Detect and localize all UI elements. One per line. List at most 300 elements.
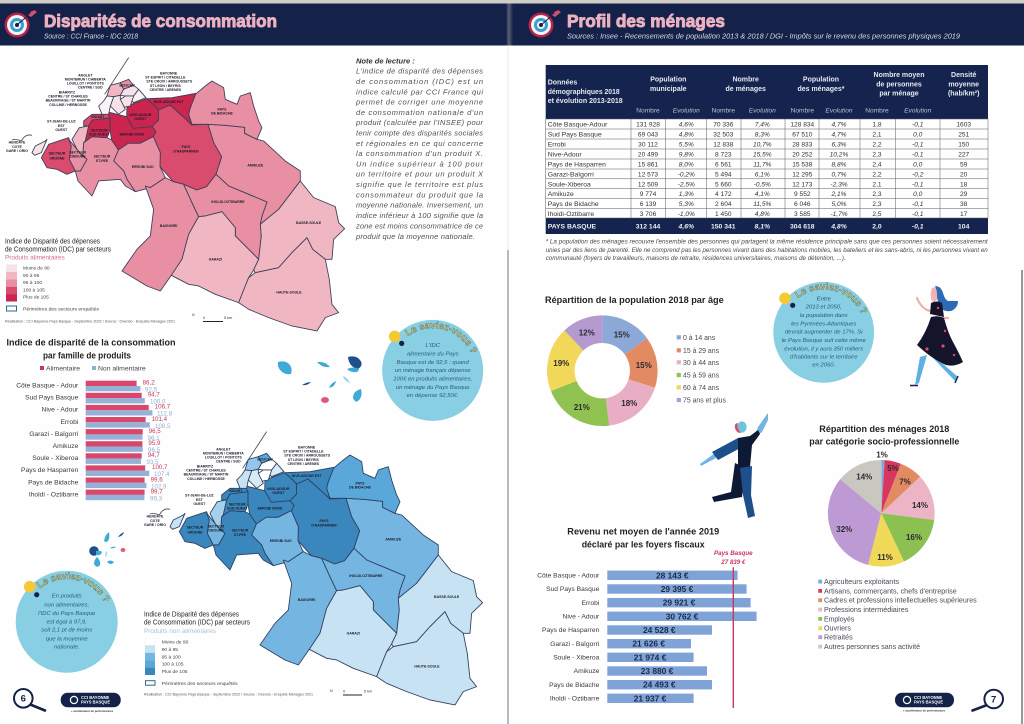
- table header: Nombre: [712, 108, 735, 114]
- bar chart: revenu: Pays de Bidache: [549, 682, 600, 689]
- map labels: [6, 71, 322, 295]
- callout text: 100€ en produits alimentaires,: [393, 376, 472, 382]
- table rows: 6,3%: [831, 142, 847, 148]
- table rows: 28 833: [792, 142, 813, 148]
- table rows: 3 585: [794, 211, 811, 218]
- map labels: BIARRITZ: [59, 90, 76, 94]
- map labels: PAYS: [320, 519, 329, 523]
- map labels: CIBOURE: [208, 529, 224, 533]
- map labels: HENDAYE: [9, 141, 26, 145]
- table rows: 4,7%: [831, 122, 847, 128]
- map labels: ERROBI SUD: [132, 165, 154, 169]
- table rows: -0,1: [912, 201, 924, 208]
- bar chart: alimentaire vs non alimentaire: Garazi - Baïgorri: [29, 431, 79, 438]
- table rows: 2,3: [872, 191, 882, 198]
- table header: moyenne: [948, 81, 979, 88]
- map labels: HAUTE-SOULE: [414, 665, 440, 669]
- heading: revenu net moyen: Revenu net moyen de l'année 2019: [567, 526, 719, 536]
- table rows: 10,7%: [753, 142, 772, 148]
- table header: Evolution: [904, 108, 932, 114]
- title: Disparités de consommation: [44, 11, 277, 31]
- table total row: 2,0: [872, 224, 882, 230]
- legend: pie: Agriculteurs exploitants: [824, 579, 900, 586]
- table rows: 3 706: [640, 211, 657, 218]
- reference line: Pays Basque: [714, 550, 753, 708]
- table rows: Nive-Adour: [548, 152, 582, 158]
- table header: [548, 72, 979, 114]
- bar chart: alimentaire vs non alimentaire: 107,4: [154, 471, 170, 478]
- table rows: 2,3: [872, 152, 882, 158]
- logo CCI right: PAYS BASQUE: [914, 700, 943, 704]
- table header: de personnes: [876, 81, 922, 88]
- map labels: STE CROIX / ARROUSSETS: [146, 80, 193, 84]
- table rows: -0,1: [912, 122, 924, 128]
- bar chart: alimentaire vs non alimentaire: 92,5: [145, 386, 158, 394]
- table rows: 251: [958, 132, 970, 138]
- table rows: 4,6%: [679, 122, 694, 128]
- table rows: 131 928: [636, 122, 660, 128]
- map labels: PAYS: [356, 481, 365, 485]
- callout text: L'IDC: [425, 343, 441, 349]
- map labels: SUD-OUEST: [89, 132, 110, 136]
- callout: le saviez-vous population: [773, 282, 874, 383]
- table rows: 12 509: [638, 181, 658, 188]
- table header: par ménage: [879, 91, 919, 98]
- table header: démographiques 2018: [548, 89, 620, 96]
- table rows: -1,7%: [830, 211, 848, 218]
- bar chart: revenu: 29 921 €: [663, 598, 696, 608]
- bar chart: alimentaire vs non alimentaire: Errobi: [60, 419, 79, 426]
- map labels: IHOLDI-OZTIBARRE: [349, 574, 383, 578]
- legend: map non alimentaire: Réalisation : CCI Bayonne Pays Basque - Septembre 2022 / Source : Oxendo - Enquête Ménages 2021: [144, 692, 313, 696]
- text block: note de lecture: permet de corriger une moyenne: [355, 98, 483, 107]
- map labels: ST LEON / BEYRIS: [150, 84, 181, 88]
- callout heading: Le saviez-vous ?: [36, 572, 110, 601]
- map labels: BAIGORRI: [298, 598, 315, 602]
- table rows: 2 604: [715, 201, 732, 208]
- callout text: l'IDC du Pays Basque: [38, 611, 96, 617]
- bar chart: alimentaire vs non alimentaire: Alimentaire: [46, 365, 80, 372]
- logo CCI right: + accélérateur de performances: [903, 708, 946, 712]
- map labels: EST: [196, 498, 204, 502]
- legend: map alimentaire: 5 km: [224, 316, 232, 320]
- map labels: ST-PEE: [96, 159, 109, 163]
- legend: donut: 60 à 74 ans: [683, 385, 720, 392]
- legend: map alimentaire: Plus de 105: [23, 294, 49, 300]
- table header: Population: [650, 76, 686, 84]
- bar chart: alimentaire vs non alimentaire: 86,2: [143, 380, 155, 386]
- pie chart: ménages par CSP: 11%: [877, 553, 893, 562]
- map labels: AMIKUZE: [247, 164, 264, 168]
- map labels: OUEST: [55, 128, 68, 132]
- legend: pie: Cadres et professions intellectuelles supérieures: [824, 598, 977, 605]
- bar chart: alimentaire vs non alimentaire: 99,6: [151, 476, 163, 483]
- map labels: LOUILLOT / PONTOTS: [67, 81, 105, 85]
- callout text: [782, 296, 866, 368]
- map labels: BAYONNE: [160, 71, 178, 75]
- table rows: -0,1: [912, 181, 924, 188]
- map labels: BIARRITZ: [197, 464, 214, 468]
- bar chart: alimentaire vs non alimentaire: 96,1: [148, 435, 160, 442]
- legend: donut: 45 à 59 ans: [683, 372, 720, 380]
- donut chart: population par âge: 18%: [621, 399, 637, 408]
- bar chart: alimentaire vs non alimentaire: 94,7: [148, 392, 160, 399]
- legend: pie: Retraités: [824, 635, 853, 642]
- table rows: 20 252: [792, 152, 813, 158]
- legend: pie: Professions intermédiaires: [824, 607, 909, 614]
- map labels: STE CROIX / ARROUSSETS: [284, 454, 331, 458]
- bar chart: revenu: Sud Pays Basque: [546, 586, 600, 593]
- legend: map non alimentaire: 100 à 105: [162, 662, 184, 668]
- bar chart: revenu: Garazi - Baïgorri: [550, 641, 600, 648]
- text block: note de lecture: signifie que le territoire est plus: [356, 180, 483, 189]
- legend: map non alimentaire: 5 km: [364, 690, 372, 694]
- bar chart: revenu: 21 937 €: [634, 693, 667, 703]
- bar chart: alimentaire vs non alimentaire: Côte Basque - Adour: [16, 382, 79, 390]
- heading: revenu net moyen: [567, 526, 719, 550]
- table rows: 5 660: [715, 181, 732, 188]
- table rows: 29: [960, 191, 968, 198]
- icon: bulb: [389, 331, 404, 346]
- text block: note de lecture: indice inférieur à 100 signifie que la: [356, 211, 483, 220]
- legend: map alimentaire: [5, 238, 232, 324]
- map labels: ST ESPRIT / CITADELLE: [145, 76, 186, 80]
- table header: et évolution 2013-2018: [548, 98, 623, 105]
- table rows: 20 499: [638, 152, 658, 158]
- legend: pie: Autres personnes sans activité: [824, 644, 920, 651]
- pie chart: ménages par CSP: 16%: [906, 533, 922, 542]
- callout text: devrait augmenter de 17%. Si: [785, 330, 863, 336]
- pie chart: ménages par CSP: 7%: [899, 478, 911, 486]
- bar chart: revenu: 29 395 €: [661, 584, 694, 594]
- table rows: 5,0%: [831, 201, 847, 208]
- callout text: [38, 594, 96, 651]
- page number 6: 6: [21, 694, 26, 704]
- map labels: PAYS: [218, 107, 227, 111]
- legend: map non alimentaire: N: [330, 689, 333, 693]
- pie chart: ménages par CSP: 14%: [912, 501, 928, 510]
- table rows: 0,7%: [831, 171, 847, 178]
- legend: donut: 0 à 14 ans: [683, 335, 716, 342]
- table total row: 150 341: [711, 224, 736, 230]
- logo CCI left: [61, 693, 121, 713]
- map labels: COLLINE / HERBOSSE: [49, 103, 88, 107]
- legend: map alimentaire: 95 à 100: [23, 280, 42, 286]
- map labels: NIVE-ADOUR: [129, 113, 152, 117]
- bar chart: alimentaire vs non alimentaire: 93,5: [146, 459, 159, 466]
- table total row: 304 618: [790, 224, 815, 230]
- page number 7: [972, 690, 1003, 710]
- text block: note de lecture: zone est moins consommatrice de ce: [355, 222, 483, 230]
- bar chart: revenu: 28 143 €: [656, 570, 689, 580]
- bar chart: alimentaire vs non alimentaire: 108,5: [155, 423, 171, 430]
- text block: note de lecture: [355, 56, 484, 241]
- legend: map non alimentaire: Produits non alimentaires: [144, 628, 216, 635]
- bar chart: alimentaire vs non alimentaire: Nive - Adour: [41, 407, 79, 414]
- legend: map non alimentaire: 90 à 95: [162, 647, 178, 653]
- text block: note de lecture: de consommation (IDC) est un: [356, 77, 483, 86]
- table header: Densité: [951, 72, 976, 79]
- map labels: ANGLET: [78, 73, 93, 77]
- map labels: SECTEUR: [91, 129, 108, 133]
- legend: pie: Ouvriers: [824, 626, 852, 633]
- map labels: ST ESPRIT / CITADELLE: [283, 450, 324, 454]
- table rows: [548, 122, 971, 218]
- table rows: 0,0: [913, 132, 923, 138]
- icon: target right: [528, 10, 561, 38]
- table rows: Côte Basque-Adour: [548, 122, 608, 128]
- table total row: [548, 224, 970, 230]
- callout text: évolution, il y aura 350 milliers: [784, 346, 863, 352]
- bar chart: alimentaire vs non alimentaire: 101,4: [152, 416, 168, 423]
- table rows: Pays de Bidache: [548, 201, 599, 208]
- legend: map alimentaire: Périmètres des secteurs enquêtés: [23, 306, 100, 312]
- text block: note de lecture: de consommation nationale d'un: [356, 108, 483, 117]
- source line: Source : CCI France - IDC 2018: [44, 31, 138, 40]
- heading: indice par famille: [6, 338, 176, 362]
- bar chart: alimentaire vs non alimentaire: 96,5: [149, 428, 161, 435]
- table rows: 12 295: [792, 171, 813, 178]
- table rows: 5,5%: [679, 142, 694, 148]
- callout text: d'habitants sur le territoire: [790, 355, 858, 361]
- logo CCI right: [895, 693, 954, 712]
- text block: note de lecture: moyenne nationale. Inversement, un: [356, 201, 483, 210]
- callout heading: Le saviez-vous ?: [794, 282, 868, 313]
- map labels: CENTRE / SUD: [78, 86, 103, 90]
- table rows: 12 573: [638, 171, 658, 178]
- pie chart: ménages par CSP: 5%: [887, 464, 899, 473]
- table rows: 0,0: [913, 162, 923, 168]
- callout: le saviez-vous alimentaire: [382, 320, 484, 421]
- map labels: BEAURIVAGE / ST MARTIN: [184, 473, 229, 477]
- table rows: Garazi-Baïgorri: [548, 171, 594, 178]
- heading: revenu net moyen: déclaré par les foyers fiscaux: [582, 540, 705, 550]
- table rows: 1,3%: [679, 191, 694, 198]
- bar chart: alimentaire vs non alimentaire: Amikuze: [53, 443, 79, 450]
- table rows: 8,8%: [831, 162, 847, 168]
- pie chart: ménages par CSP: 14%: [856, 472, 872, 482]
- bar chart: alimentaire vs non alimentaire: 95,9: [148, 440, 161, 447]
- map labels: D'HASPARREN: [311, 523, 337, 527]
- table header: Evolution: [673, 108, 700, 114]
- callout text: nationale.: [54, 645, 79, 651]
- map labels: SECTEUR: [49, 152, 66, 156]
- map labels: GARAZI: [209, 258, 222, 262]
- table rows: 4,7%: [831, 132, 847, 138]
- legend: donut: [677, 335, 726, 404]
- bar chart: revenu: 23 880 €: [641, 666, 674, 676]
- donut chart: population par âge: [547, 315, 658, 426]
- legend: map alimentaire: N: [192, 313, 195, 317]
- bar chart: alimentaire vs non alimentaire: 99,3: [150, 495, 163, 502]
- table header: Nombre: [732, 76, 759, 84]
- map labels: SECTEUR: [187, 526, 204, 530]
- legend: map non alimentaire: 0: [343, 690, 345, 694]
- page number 7: 7: [991, 694, 996, 705]
- map labels: SUD-OUEST: [227, 506, 248, 510]
- table rows: 2,2: [872, 142, 882, 148]
- footnote: [546, 238, 988, 262]
- map labels: SECTEUR: [207, 525, 224, 529]
- legend: donut: 75 ans et plus: [683, 398, 726, 404]
- map labels: BOUCAU: [257, 457, 273, 461]
- map labels: ERROBI SUD: [270, 539, 292, 543]
- donut chart: population par âge: 21%: [574, 403, 590, 412]
- text block: note de lecture: indice calculé par CCI France qui: [356, 87, 483, 96]
- logo CCI right: CCI BAYONNE: [914, 695, 943, 700]
- table header: Evolution: [825, 108, 853, 114]
- table rows: 15 861: [638, 162, 658, 168]
- table rows: -0,5%: [754, 181, 771, 188]
- table rows: 12 173: [792, 181, 813, 188]
- table rows: 1603: [956, 122, 971, 128]
- table rows: 7,4%: [755, 122, 770, 128]
- callout text: que la moyenne: [46, 636, 88, 642]
- map labels: MONTBRUN / CHIBERTA: [203, 451, 244, 455]
- table rows: 11,5%: [753, 201, 772, 208]
- bar chart: alimentaire vs non alimentaire: [16, 365, 173, 502]
- table header: Nombre moyen: [874, 72, 924, 79]
- table rows: 6 046: [794, 201, 811, 208]
- table rows: 6 139: [640, 201, 657, 208]
- table rows: -2,3%: [830, 181, 848, 188]
- table rows: 4,1%: [755, 191, 770, 198]
- table rows: 6 561: [715, 162, 732, 168]
- table rows: 67 510: [792, 132, 813, 138]
- bar chart: alimentaire vs non alimentaire: 96,5: [148, 447, 161, 454]
- text block: note de lecture: produit (calculée par l'INSEE) pour: [355, 118, 484, 127]
- donut chart: population par âge: 12%: [579, 328, 595, 338]
- icon: target left: [4, 10, 37, 38]
- callout text: un ménage français dépense: [395, 368, 471, 374]
- bar chart: alimentaire vs non alimentaire: 100,0: [150, 399, 166, 406]
- table rows: -0,1: [912, 142, 924, 148]
- map labels: GARE / ORIO: [6, 149, 28, 153]
- icon: bulb: [779, 292, 795, 308]
- title: Profil des ménages: [567, 11, 725, 31]
- logo CCI left: CCI BAYONNE: [81, 695, 110, 700]
- table rows: Sud Pays Basque: [548, 132, 602, 138]
- legend: map alimentaire: Produits alimentaires: [5, 254, 65, 262]
- text block: note de lecture: Note de lecture :: [356, 56, 415, 66]
- reference line: Pays Basque: 27 839 €: [720, 559, 746, 566]
- table rows: 9 552: [794, 191, 811, 198]
- table rows: 15,5%: [753, 152, 772, 158]
- map labels: AMIKUZE: [385, 538, 402, 542]
- map labels: SECTEUR: [94, 155, 111, 159]
- page number 6: [14, 689, 45, 710]
- map labels: URUGNE: [49, 156, 65, 160]
- text block: note de lecture: la consommation d'un produit X.: [356, 149, 483, 158]
- map labels: PAYS: [182, 145, 191, 149]
- map labels: DE BIDACHE: [349, 486, 371, 490]
- table rows: 227: [958, 152, 970, 158]
- map labels: BASSE-SOULE: [296, 221, 322, 225]
- logo CCI left: + accélérateur de performances: [71, 709, 114, 713]
- table header: Nombre: [865, 108, 889, 114]
- table rows: 2,5: [872, 211, 882, 218]
- text block: note de lecture: tenir compte des disparités sociales: [356, 128, 483, 138]
- bar chart: alimentaire vs non alimentaire: Soule - Xiberoa: [32, 455, 79, 462]
- text block: note de lecture: produit que la moyenne nationale.: [355, 232, 475, 241]
- legend: map alimentaire: Moins de 90: [23, 266, 50, 272]
- table header: Nombre: [636, 108, 660, 114]
- table rows: 2,1%: [830, 191, 847, 198]
- map labels: CIBOURE: [70, 155, 86, 159]
- table rows: 38: [960, 201, 968, 208]
- table rows: 128 834: [790, 122, 815, 128]
- table rows: 2,3: [872, 201, 882, 208]
- pie chart: ménages par CSP: 1%: [876, 451, 888, 460]
- table header: (hab/km²): [948, 91, 979, 98]
- bar chart: revenu: Errobi: [581, 600, 600, 607]
- table rows: -0,2%: [678, 171, 695, 178]
- table rows: -1,0%: [678, 211, 695, 218]
- table header: de ménages: [725, 86, 766, 93]
- callout text: non alimentaires,: [44, 602, 89, 608]
- heading: ménages par CSP: [809, 424, 959, 446]
- table rows: -0,1: [912, 211, 924, 218]
- map labels: GARAZI: [347, 632, 360, 636]
- table rows: 2,2: [872, 171, 882, 178]
- map labels: CENTRE / ST CHARLES: [48, 95, 88, 99]
- map labels: BOUCAU: [119, 83, 135, 87]
- legend: map non alimentaire: Indice de Disparité des dépenses: [144, 612, 240, 618]
- bar chart: revenu: Nive - Adour: [562, 614, 600, 620]
- table rows: Soule-Xiberoa: [548, 181, 591, 188]
- table rows: 1 450: [715, 211, 732, 218]
- map labels: ST-JEAN-DE-LUZ: [185, 494, 215, 498]
- callout text: la population dans: [800, 313, 848, 319]
- map labels: BIDART: [91, 115, 105, 119]
- table total row: 4,8%: [830, 224, 847, 230]
- table total row: -0,1: [912, 224, 924, 230]
- table rows: 8 723: [715, 152, 732, 158]
- map labels: ST LEON / BEYRIS: [288, 458, 319, 462]
- callout text: les Pyrénées-Atlantiques: [791, 321, 856, 327]
- map labels: COTE: [150, 519, 161, 523]
- table rows: 18: [960, 181, 968, 188]
- map labels: ANGLET: [216, 447, 231, 451]
- table rows: 4,8%: [679, 132, 694, 138]
- callout heading: Le saviez-vous ?: [404, 321, 477, 352]
- map labels: MONTBRUN / CHIBERTA: [65, 77, 106, 81]
- callout text: un ménage du Pays Basque: [396, 385, 470, 391]
- table rows: 70 336: [713, 122, 734, 128]
- bar chart: alimentaire vs non alimentaire: 99,7: [151, 488, 163, 495]
- map labels: ST-JEAN-DE-LUZ: [47, 120, 77, 124]
- header: Profil des ménages: [506, 4, 1024, 46]
- text block: note de lecture: et régionales en ce qui concerne: [356, 139, 483, 148]
- text block: note de lecture: un territoire et pour un produit X: [356, 170, 484, 179]
- table rows: 30 112: [638, 142, 658, 148]
- figure: man leaping: [700, 413, 768, 518]
- map labels: BAIGORRI: [160, 224, 177, 228]
- table rows: 9 774: [640, 191, 657, 198]
- table rows: 17: [960, 211, 968, 218]
- table rows: 5,3%: [679, 201, 694, 208]
- table rows: Amikuze: [548, 191, 574, 198]
- legend: map non alimentaire: de Consommation (IDC) par secteurs: [144, 620, 251, 627]
- legend: map alimentaire: Indice de Disparité des dépenses: [5, 238, 101, 246]
- legend: map alimentaire: 0: [203, 316, 205, 320]
- bar chart: alimentaire vs non alimentaire: Pays de Hasparren: [21, 467, 79, 474]
- map labels: CENTRE / ARENES: [288, 462, 320, 466]
- source line: Sources : Insee - Recensements de population 2013 & 2018 / DGI - Impôts sur le revenu des personnes physiques 2019: [567, 32, 960, 40]
- figure: woman walking: [910, 286, 963, 386]
- data table: [546, 65, 988, 234]
- table header: Population: [803, 76, 839, 84]
